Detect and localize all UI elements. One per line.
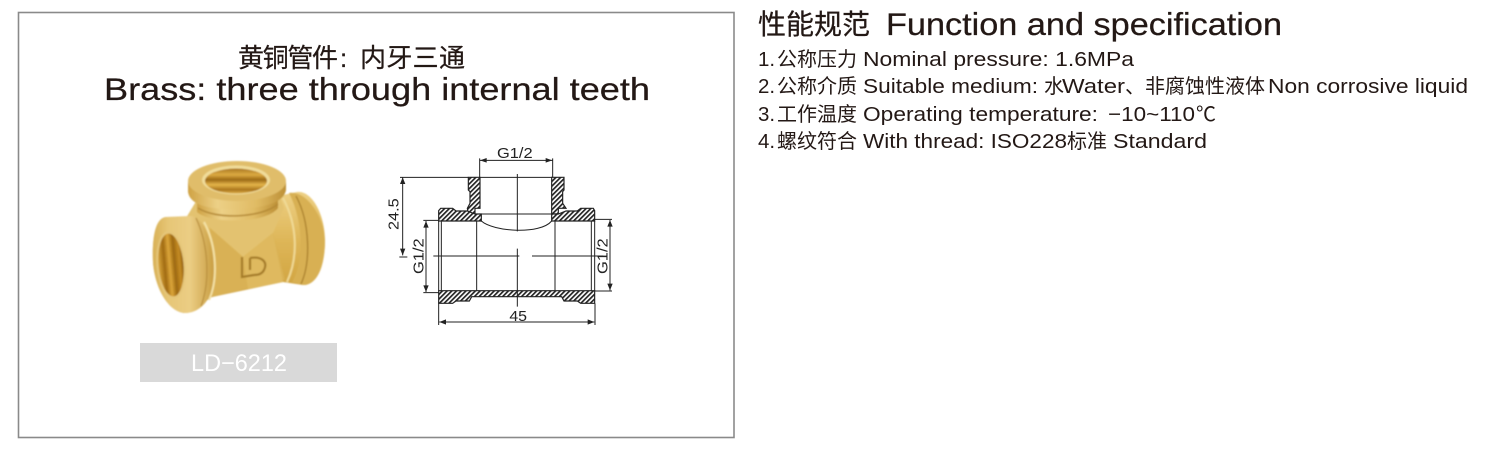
spec: suitable medium: Water: [1062, 75, 1125, 98]
inner lines: [439, 177, 595, 291]
spec: thread: 4.: [758, 130, 775, 153]
dimension: right G1/2: G1/2: [595, 238, 611, 274]
spec: suitable medium: 水: [1044, 75, 1064, 98]
dimension: left G1/2: G1/2: [411, 238, 427, 274]
spec: thread: With thread: ISO228: [863, 130, 1067, 153]
spec: nominal pressure: 1.: [758, 48, 775, 71]
heading: Chinese product name: :: [340, 43, 347, 73]
heading: Chinese product name: 内牙三通: [360, 43, 465, 73]
spec: suitable medium: [758, 75, 1468, 98]
dimension: 24.5: 24.5: [386, 198, 402, 230]
heading: function and specification: Function and specification: [886, 6, 1282, 42]
spec: suitable medium: Non corrosive liquid: [1268, 75, 1468, 98]
spec: suitable medium: 非腐蚀性液体: [1145, 75, 1265, 98]
heading: Chinese product name: [238, 43, 465, 73]
hatched wall: top left collar: [467, 177, 480, 214]
hatched wall: left shoulder: [439, 208, 481, 221]
spec: thread: [758, 130, 1207, 153]
hatched wall: bottom: [439, 291, 595, 303]
heading: Chinese product name: 黄铜管件: [238, 43, 338, 73]
model label: LD-6212: LD−6212: [191, 350, 287, 377]
spec: suitable medium: 公称介质: [777, 75, 857, 98]
panel: product: [18, 12, 734, 438]
heading: function and specification: [758, 6, 1282, 42]
spec: operating temperature: 3.: [758, 103, 775, 126]
heading: English product name: Brass: three through internal teeth: [104, 71, 650, 107]
spec: thread: 螺纹符合: [777, 130, 857, 153]
spec: nominal pressure: [758, 48, 1135, 71]
heading: function and specification: 性能规范: [758, 9, 870, 40]
spec: operating temperature: Operating temperature:: [863, 103, 1098, 126]
dimension: left G1/2: [411, 220, 439, 293]
model label: LD-6212: [140, 343, 337, 382]
dimension: 45: [439, 303, 595, 325]
dimension: right G1/2: [595, 219, 613, 291]
spec: thread: Standard: [1113, 130, 1207, 153]
dimension: top G1/2: [480, 146, 553, 177]
dimension: top G1/2: G1/2: [497, 146, 533, 162]
spec: suitable medium: Suitable medium:: [863, 75, 1038, 98]
spec: nominal pressure: Nominal pressure: 1.6MPa: [863, 48, 1135, 71]
hatched wall: top right collar: [552, 177, 566, 214]
spec: operating temperature: ℃: [1196, 104, 1216, 126]
spec: suitable medium: 2.: [758, 75, 775, 98]
spec: operating temperature: −10~110: [1108, 103, 1195, 126]
spec: operating temperature: 工作温度: [777, 103, 857, 126]
hatched wall: right shoulder: [552, 208, 595, 221]
spec: nominal pressure: 公称压力: [777, 48, 857, 71]
spec: operating temperature: [758, 103, 1216, 126]
photo: brass tee fitting: [153, 161, 325, 313]
dimension: 24.5: [386, 177, 468, 257]
centre lines: [433, 174, 603, 307]
technical drawing: tee cross-section: [386, 146, 613, 325]
spec: thread: 标准: [1067, 130, 1107, 153]
spec list: [758, 48, 1468, 153]
dimension: 45: 45: [509, 309, 527, 325]
spec: suitable medium: 、: [1125, 76, 1145, 98]
